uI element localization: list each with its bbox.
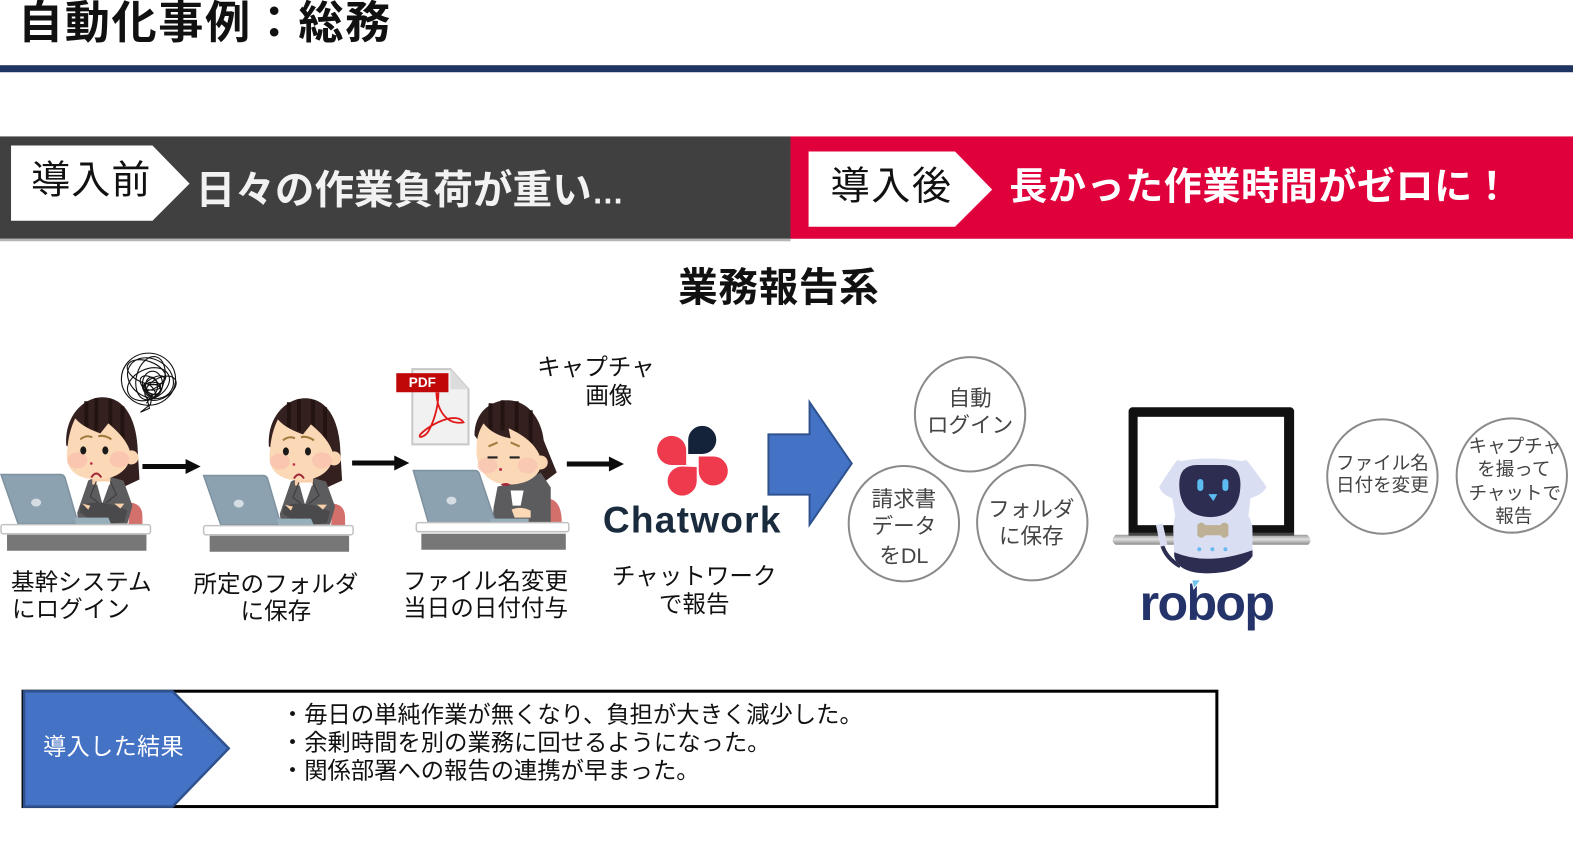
after tag [809,151,992,227]
arrow: step 2 to 3 [352,455,409,470]
circle: capture and report by chat: 報告 [1495,506,1532,527]
icon: laptop with robot [1113,407,1310,573]
title rule [0,65,1573,72]
label: step 4: で報告 [659,591,730,617]
label: capture image: 画像 [585,382,632,408]
result tag [24,691,229,807]
panel: results [23,691,1217,807]
circle: auto login: ログイン [927,412,1013,437]
step 3: tired worker [413,400,569,550]
label: capture image: キャプチャ [537,354,655,380]
circle: invoice data download: 請求書 [872,487,936,512]
circle: capture and report by chat [1457,418,1567,533]
panel: before banner [0,136,791,241]
logo: Chatwork [603,426,781,541]
result bullet list: ・関係部署への報告の連携が早まった。 [281,757,700,783]
arrow: big blue [768,402,852,525]
before headline: 日々の作業負荷が重い [196,169,592,213]
robot dog [1156,458,1267,573]
step 1: worried worker at laptop [1,350,181,551]
label: step 1: にログイン [12,596,130,622]
label: step 2: に保存 [241,598,311,624]
icon: PDF document [396,369,468,444]
label: step 3: 当日の日付付与 [403,595,568,621]
before headline: … [592,175,624,211]
section heading: 業務報告系 [678,266,879,310]
label: step 1: 基幹システム [11,569,152,595]
circle: capture and report by chat: キャプチャ [1469,435,1561,456]
circle: invoice data download: をDL [879,543,928,568]
logo: Chatwork: Chatwork [603,499,781,541]
circle: save to folder [977,465,1087,580]
icon: scribble thought [120,350,181,412]
result bullet list: ・余剰時間を別の業務に回せるようになった。 [281,729,770,755]
circle: change file name and date: ファイル名 [1336,452,1429,473]
before tag [11,145,190,221]
label: step 4: チャットワーク [612,563,777,589]
after headline: 長かった作業時間がゼロに！ [1009,166,1511,209]
step 2: worried worker [204,398,353,552]
circle: auto login: 自動 [949,385,992,410]
circle: change file name and date [1327,419,1438,534]
circle: change file name and date: 日付を変更 [1336,475,1429,496]
result tag: 導入した結果 [43,733,184,759]
circle: invoice data download [849,466,959,581]
circle: save to folder: フォルダ [988,497,1074,522]
panel: after banner [791,136,1573,239]
circle: auto login [915,357,1025,471]
before tag: 導入前 [31,160,150,203]
result bullet list: ・毎日の単純作業が無くなり、負担が大きく減少した。 [281,701,863,727]
arrow: step 3 to 4 [567,456,624,471]
after tag: 導入後 [831,166,951,209]
circle: invoice data download: データ [872,514,936,539]
circle: save to folder: に保存 [999,524,1064,549]
icon: PDF document: PDF [409,375,436,390]
label: step 2: 所定のフォルダ [193,571,358,597]
circle: capture and report by chat: を撮って [1477,459,1550,480]
logo: robop: robop [1140,575,1275,631]
label: step 3: ファイル名変更 [403,568,568,594]
circle: capture and report by chat: チャットで [1469,483,1561,504]
arrow: step 1 to 2 [142,459,201,474]
